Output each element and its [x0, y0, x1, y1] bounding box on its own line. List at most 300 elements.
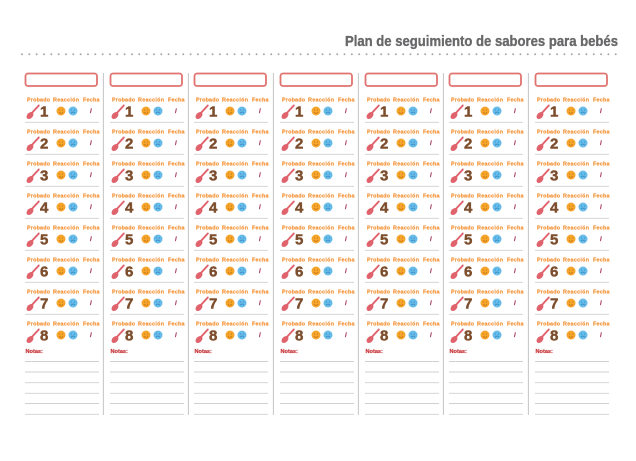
row 5: Probado — [451, 226, 475, 232]
row 5: 5 — [40, 232, 48, 248]
row 4 — [110, 194, 186, 218]
row 6: Reacción — [477, 258, 503, 264]
row 3 — [365, 162, 440, 186]
row 4 — [25, 194, 100, 218]
notes — [449, 349, 523, 414]
row 1 — [25, 98, 100, 122]
notes: Notas: — [110, 349, 128, 355]
row 8: Reacción — [222, 322, 248, 328]
row 3 — [110, 162, 186, 186]
row 7: Fecha — [507, 290, 524, 296]
row 5: Probado — [196, 226, 220, 232]
row 7: Reacción — [477, 290, 503, 296]
row 1: 1 — [209, 104, 217, 120]
row 5 — [365, 226, 440, 250]
row 7: / — [175, 300, 177, 307]
row 8: Fecha — [168, 322, 186, 328]
row 4: Reacción — [222, 194, 248, 200]
row 4: / — [600, 204, 602, 211]
row 8: Reacción — [393, 322, 419, 328]
row 5 — [449, 226, 524, 250]
row 6: Probado — [367, 258, 391, 264]
row 6: 6 — [295, 264, 303, 280]
row 5: / — [259, 236, 261, 243]
row 7: Probado — [196, 290, 220, 296]
row 2: Probado — [367, 130, 391, 136]
row 3: 3 — [209, 168, 217, 184]
row 2: / — [175, 140, 177, 147]
row 4: / — [90, 204, 92, 211]
row 7: / — [600, 300, 602, 307]
row 4: Fecha — [168, 194, 186, 200]
row 1: / — [514, 108, 516, 115]
row 2: / — [430, 140, 432, 147]
row 7: Probado — [27, 290, 51, 296]
name box — [366, 74, 437, 86]
row 4: Reacción — [563, 194, 589, 200]
row 1: / — [90, 108, 92, 115]
row 3: 3 — [550, 168, 558, 184]
notes — [535, 349, 609, 414]
row 7: Reacción — [53, 290, 79, 296]
notes — [194, 349, 268, 414]
row 7: Probado — [282, 290, 306, 296]
row 5: 5 — [464, 232, 472, 248]
row 2: Fecha — [83, 130, 100, 136]
row 2: Fecha — [593, 130, 610, 136]
row 3: Reacción — [393, 162, 419, 168]
row 6 — [365, 258, 440, 282]
notes — [25, 349, 99, 414]
row 3: Fecha — [423, 162, 440, 168]
row 2: / — [600, 140, 602, 147]
row 2: Reacción — [563, 130, 589, 136]
row 1: 1 — [125, 104, 133, 120]
name box — [280, 74, 352, 86]
row 4: 4 — [40, 200, 49, 216]
row 8 — [194, 322, 270, 344]
row 7: Probado — [367, 290, 391, 296]
row 8: / — [600, 332, 602, 339]
row 5: Probado — [27, 226, 51, 232]
row 1 — [194, 98, 270, 122]
notes: Notas: — [194, 349, 212, 355]
row 5: Fecha — [338, 226, 356, 232]
row 2: Reacción — [308, 130, 334, 136]
row 3: Reacción — [222, 162, 248, 168]
row 1: Probado — [27, 98, 51, 104]
row 2: Fecha — [252, 130, 270, 136]
row 6 — [110, 258, 186, 282]
row 3: Fecha — [593, 162, 610, 168]
row 7: 7 — [464, 296, 472, 312]
row 8: Probado — [27, 322, 51, 328]
row 5: Probado — [282, 226, 306, 232]
row 3: Reacción — [138, 162, 164, 168]
row 3: / — [175, 172, 177, 179]
row 5: Reacción — [393, 226, 419, 232]
row 2: Reacción — [53, 130, 79, 136]
row 7: Fecha — [83, 290, 100, 296]
row 1: Fecha — [338, 98, 356, 104]
row 7: / — [259, 300, 261, 307]
row 4: Probado — [367, 194, 391, 200]
column 6 panel — [449, 74, 524, 414]
row 8 — [449, 322, 524, 344]
row 6: Fecha — [423, 258, 440, 264]
row 6: 6 — [550, 264, 558, 280]
column 3 panel — [194, 74, 270, 414]
column 7 panel — [535, 74, 610, 414]
row 2: 2 — [295, 136, 303, 152]
row 7: 7 — [550, 296, 558, 312]
row 2: Probado — [282, 130, 306, 136]
row 1: Reacción — [53, 98, 79, 104]
row 7: Reacción — [138, 290, 164, 296]
row 2: / — [259, 140, 261, 147]
row 5 — [194, 226, 270, 250]
row 6: 6 — [40, 264, 48, 280]
notes: Notas: — [366, 349, 383, 355]
name box — [26, 74, 97, 86]
row 4: Reacción — [393, 194, 419, 200]
row 6: / — [259, 268, 261, 275]
row 7: 7 — [125, 296, 133, 312]
row 1: / — [345, 108, 347, 115]
notes — [365, 349, 439, 414]
row 8: Probado — [537, 322, 561, 328]
row 8 — [110, 322, 186, 344]
row 1 — [535, 98, 610, 122]
row 8: / — [345, 332, 347, 339]
row 8: Fecha — [507, 322, 524, 328]
row 7 — [365, 290, 440, 314]
row 4: Fecha — [593, 194, 610, 200]
row 2 — [449, 130, 524, 154]
row 3: Fecha — [252, 162, 270, 168]
row 4: Fecha — [83, 194, 100, 200]
row 5: / — [600, 236, 602, 243]
row 8: / — [90, 332, 92, 339]
row 1: / — [259, 108, 261, 115]
row 6: / — [90, 268, 92, 275]
row 2: 2 — [209, 136, 217, 152]
row 6 — [449, 258, 524, 282]
row 8: Fecha — [252, 322, 270, 328]
row 4: 4 — [550, 200, 559, 216]
row 5: Probado — [112, 226, 136, 232]
row 3: Reacción — [53, 162, 79, 168]
column divider — [527, 73, 529, 415]
row 2: 2 — [125, 136, 133, 152]
row 4: / — [345, 204, 347, 211]
row 5 — [25, 226, 100, 250]
row 8: Reacción — [308, 322, 334, 328]
row 3 — [449, 162, 524, 186]
row 5: / — [175, 236, 177, 243]
row 2: 2 — [380, 136, 388, 152]
row 5: Reacción — [53, 226, 79, 232]
row 7: Reacción — [308, 290, 334, 296]
row 2 — [280, 130, 356, 154]
row 8: 8 — [550, 328, 558, 344]
row 7: / — [514, 300, 516, 307]
row 3: 3 — [464, 168, 472, 184]
name box — [536, 74, 607, 86]
row 6: Probado — [537, 258, 561, 264]
row 8: Reacción — [53, 322, 79, 328]
name box — [450, 74, 521, 86]
row 3: Probado — [27, 162, 51, 168]
row 2: Fecha — [168, 130, 186, 136]
row 1: 1 — [550, 104, 558, 120]
row 8: Fecha — [338, 322, 356, 328]
row 1: Probado — [451, 98, 475, 104]
row 2: / — [514, 140, 516, 147]
row 2: Probado — [27, 130, 51, 136]
row 7: / — [345, 300, 347, 307]
row 4 — [449, 194, 524, 218]
row 1: Fecha — [168, 98, 186, 104]
row 5: Probado — [537, 226, 561, 232]
row 8 — [535, 322, 610, 344]
row 8: / — [514, 332, 516, 339]
row 1 — [449, 98, 524, 122]
row 5: 5 — [209, 232, 217, 248]
row 5 — [535, 226, 610, 250]
row 4: / — [175, 204, 177, 211]
row 6 — [25, 258, 100, 282]
row 3: Probado — [537, 162, 561, 168]
row 4: Fecha — [338, 194, 356, 200]
row 4: Probado — [27, 194, 51, 200]
row 8: Reacción — [477, 322, 503, 328]
row 8: Reacción — [563, 322, 589, 328]
name box — [110, 74, 182, 86]
row 3: Fecha — [168, 162, 186, 168]
row 8 — [25, 322, 100, 344]
row 3: / — [430, 172, 432, 179]
row 8: Probado — [196, 322, 220, 328]
row 6: / — [600, 268, 602, 275]
row 7: Fecha — [593, 290, 610, 296]
column divider — [102, 73, 104, 415]
row 3: Fecha — [83, 162, 100, 168]
column 5 panel — [365, 74, 440, 414]
row 5: Probado — [367, 226, 391, 232]
row 4 — [280, 194, 356, 218]
row 4: Reacción — [308, 194, 334, 200]
row 5: 5 — [125, 232, 133, 248]
row 7: 7 — [380, 296, 388, 312]
row 6: Fecha — [593, 258, 610, 264]
row 3: Fecha — [338, 162, 356, 168]
row 2: Probado — [112, 130, 136, 136]
row 4: Fecha — [252, 194, 270, 200]
row 6: 6 — [209, 264, 217, 280]
row 3 — [25, 162, 100, 186]
row 4: / — [514, 204, 516, 211]
row 4: Fecha — [507, 194, 524, 200]
row 4: 4 — [380, 200, 389, 216]
row 3: Probado — [196, 162, 220, 168]
row 3: / — [600, 172, 602, 179]
row 5: / — [430, 236, 432, 243]
row 2: / — [90, 140, 92, 147]
row 2: Fecha — [507, 130, 524, 136]
row 8 — [365, 322, 440, 344]
row 6: / — [430, 268, 432, 275]
row 5: Reacción — [222, 226, 248, 232]
row 6: Reacción — [563, 258, 589, 264]
row 4 — [365, 194, 440, 218]
row 3 — [194, 162, 270, 186]
notes — [110, 349, 184, 414]
row 8: 8 — [380, 328, 388, 344]
row 8: 8 — [125, 328, 133, 344]
row 8: Fecha — [593, 322, 610, 328]
row 7: Probado — [537, 290, 561, 296]
row 7: Reacción — [222, 290, 248, 296]
row 5: Fecha — [593, 226, 610, 232]
row 1: Fecha — [83, 98, 100, 104]
row 1: Reacción — [138, 98, 164, 104]
row 5: / — [514, 236, 516, 243]
row 4: Fecha — [423, 194, 440, 200]
row 6: 6 — [125, 264, 133, 280]
row 1: Fecha — [507, 98, 524, 104]
row 6: Fecha — [507, 258, 524, 264]
row 2: / — [345, 140, 347, 147]
row 7: 7 — [295, 296, 303, 312]
row 2: 2 — [40, 136, 48, 152]
row 6: Reacción — [308, 258, 334, 264]
row 1: / — [600, 108, 602, 115]
row 4: 4 — [295, 200, 304, 216]
row 5: / — [345, 236, 347, 243]
row 5 — [110, 226, 186, 250]
row 8: Probado — [112, 322, 136, 328]
row 7 — [280, 290, 356, 314]
row 3: / — [345, 172, 347, 179]
row 8: Fecha — [83, 322, 100, 328]
row 3: Probado — [112, 162, 136, 168]
row 5: Reacción — [138, 226, 164, 232]
row 2: Fecha — [423, 130, 440, 136]
column divider — [272, 73, 274, 415]
row 5: Fecha — [507, 226, 524, 232]
row 5: Fecha — [83, 226, 100, 232]
row 5: Reacción — [477, 226, 503, 232]
column divider — [357, 73, 359, 415]
notes — [280, 349, 354, 414]
row 8: Probado — [282, 322, 306, 328]
row 3 — [280, 162, 356, 186]
row 4 — [535, 194, 610, 218]
row 6: Reacción — [138, 258, 164, 264]
row 2 — [365, 130, 440, 154]
row 5 — [280, 226, 356, 250]
row 3: Fecha — [507, 162, 524, 168]
row 6: / — [175, 268, 177, 275]
row 1: Reacción — [563, 98, 589, 104]
row 4: Reacción — [477, 194, 503, 200]
row 7: Fecha — [252, 290, 270, 296]
row 6: Probado — [112, 258, 136, 264]
row 1: Probado — [282, 98, 306, 104]
row 7: Fecha — [423, 290, 440, 296]
row 1: 1 — [464, 104, 472, 120]
row 1: 1 — [40, 104, 48, 120]
notes: Notas: — [26, 349, 43, 355]
row 2: Probado — [451, 130, 475, 136]
row 4: Probado — [451, 194, 475, 200]
row 5: Fecha — [168, 226, 186, 232]
row 2 — [535, 130, 610, 154]
row 5: 5 — [550, 232, 558, 248]
row 2: Reacción — [222, 130, 248, 136]
row 7: Probado — [112, 290, 136, 296]
row 5: 5 — [295, 232, 303, 248]
row 1 — [110, 98, 186, 122]
notes: Notas: — [536, 349, 553, 355]
row 1: Probado — [112, 98, 136, 104]
row 8: 8 — [40, 328, 48, 344]
row 7: Reacción — [563, 290, 589, 296]
row 3: / — [259, 172, 261, 179]
row 3: Probado — [367, 162, 391, 168]
row 2: Reacción — [477, 130, 503, 136]
row 2: 2 — [464, 136, 472, 152]
dotted header rule — [22, 53, 618, 55]
row 8 — [280, 322, 356, 344]
row 2 — [194, 130, 270, 154]
row 7: Probado — [451, 290, 475, 296]
row 8: Probado — [367, 322, 391, 328]
row 7 — [25, 290, 100, 314]
row 3: 3 — [125, 168, 133, 184]
row 6 — [535, 258, 610, 282]
row 5: Reacción — [563, 226, 589, 232]
row 6: Fecha — [338, 258, 356, 264]
row 7 — [449, 290, 524, 314]
row 7: Reacción — [393, 290, 419, 296]
column divider — [187, 73, 189, 415]
row 3: Reacción — [563, 162, 589, 168]
row 6: / — [514, 268, 516, 275]
row 5: Fecha — [252, 226, 270, 232]
row 3: 3 — [380, 168, 388, 184]
column 4 panel — [280, 74, 356, 414]
row 2 — [25, 130, 100, 154]
row 6: Fecha — [168, 258, 186, 264]
row 3: Probado — [282, 162, 306, 168]
row 3: 3 — [295, 168, 303, 184]
row 6: 6 — [380, 264, 388, 280]
row 6: Fecha — [83, 258, 100, 264]
row 2: Probado — [196, 130, 220, 136]
row 7 — [194, 290, 270, 314]
row 1: Probado — [537, 98, 561, 104]
row 4: Probado — [112, 194, 136, 200]
row 7: Fecha — [168, 290, 186, 296]
column divider — [442, 73, 444, 415]
row 3: Probado — [451, 162, 475, 168]
row 1: Reacción — [477, 98, 503, 104]
row 1: Reacción — [308, 98, 334, 104]
row 7: / — [90, 300, 92, 307]
notes: Notas: — [280, 349, 298, 355]
